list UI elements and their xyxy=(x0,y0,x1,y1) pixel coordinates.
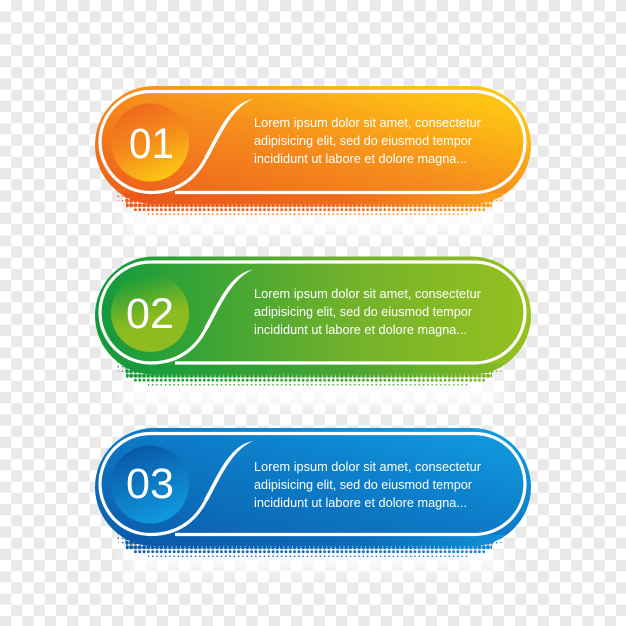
pill body 02 xyxy=(95,256,531,374)
text block 01 xyxy=(254,116,481,166)
text block 01: adipisicing elit, sed do eiusmod tempor xyxy=(254,134,472,148)
text block 03 xyxy=(254,460,481,510)
pill bottom band 03 xyxy=(120,535,506,546)
number circle 01 xyxy=(111,104,189,182)
pill bottom band 02 xyxy=(120,364,506,374)
text block 02: incididunt ut labore et dolore magna... xyxy=(254,323,467,337)
text block 03: incididunt ut labore et dolore magna... xyxy=(254,496,467,510)
panel: step 02 xyxy=(95,256,531,390)
text block 02 xyxy=(254,287,481,337)
number 03: 03 xyxy=(126,460,174,508)
panel: step 03 xyxy=(95,428,531,562)
white swoosh outline 01 xyxy=(100,92,525,192)
text block 02: adipisicing elit, sed do eiusmod tempor xyxy=(254,305,472,319)
halftone shadow 02 xyxy=(117,362,505,386)
text block 03: Lorem ipsum dolor sit amet, consectetur xyxy=(254,460,481,474)
white swoosh outline 02 xyxy=(100,262,525,363)
text block 01: incididunt ut labore et dolore magna... xyxy=(254,152,467,166)
number circle 02 xyxy=(111,274,189,352)
number 02: 02 xyxy=(126,290,174,338)
pill body 01 xyxy=(95,86,531,204)
text block 02: Lorem ipsum dolor sit amet, consectetur xyxy=(254,287,481,301)
halftone shadow 01 xyxy=(117,191,505,215)
panel: step 01 xyxy=(95,86,531,220)
text block 03: adipisicing elit, sed do eiusmod tempor xyxy=(254,478,472,492)
text block 01: Lorem ipsum dolor sit amet, consectetur xyxy=(254,116,481,130)
number 01: 01 xyxy=(129,120,174,168)
number circle 03 xyxy=(111,446,189,524)
halftone shadow 03 xyxy=(117,533,505,557)
white swoosh outline 03 xyxy=(100,434,525,534)
pill bottom band 01 xyxy=(120,193,506,204)
pill body 03 xyxy=(95,428,531,546)
